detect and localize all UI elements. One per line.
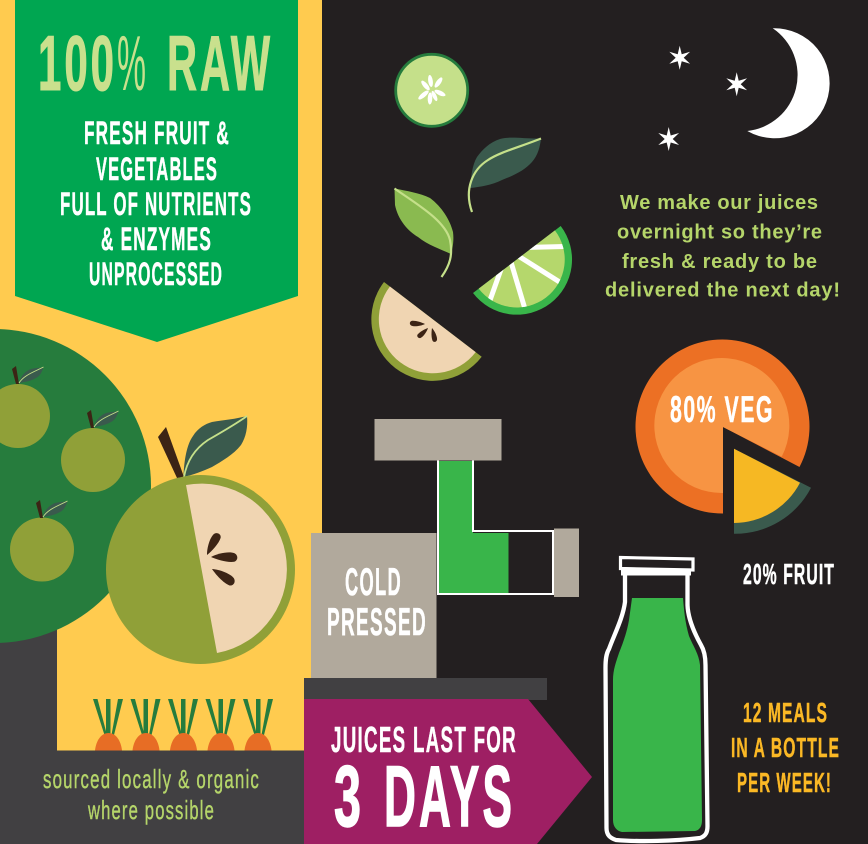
text block: banner list: FRESH FRUIT & (84, 115, 230, 151)
text block: banner list: UNPROCESSED (89, 256, 223, 292)
text block: banner list: FULL OF NUTRIENTS (60, 186, 252, 222)
text block: banner list (60, 115, 252, 292)
text block: sourced locally (43, 764, 260, 825)
callout: juices last for 3 days (304, 699, 592, 844)
label: cold pressed (327, 561, 427, 644)
icon: green leaf (394, 188, 453, 277)
icon: dark leaf (469, 138, 541, 212)
icon: apple seeds (203, 531, 237, 587)
label: 80% veg: 80% VEG (670, 389, 774, 430)
icon: tree apple 1 (0, 366, 50, 448)
text block: overnight: fresh & ready to be (622, 251, 817, 273)
icon: cucumber slice (396, 54, 468, 126)
title: 100% raw (38, 19, 273, 107)
icon: carrots (93, 699, 273, 750)
callout: juices last for 3 days: DAYS (384, 749, 515, 844)
text block: sourced locally: where possible (87, 795, 215, 825)
pie chart: 80% veg 20% fruit (636, 340, 811, 534)
text block: overnight (605, 192, 840, 302)
text block: overnight: delivered the next day! (605, 280, 840, 302)
panel: yellow background (0, 0, 322, 750)
icon: lime wedge (473, 226, 572, 315)
text block: banner list: VEGETABLES (96, 151, 218, 187)
icon: tree apple 3 (10, 500, 74, 582)
icon: apple tree (0, 329, 151, 643)
text block: 12 meals (731, 697, 840, 798)
title: 100% raw: 100 (38, 19, 117, 107)
icon: big apple (106, 416, 295, 664)
panel: grey ground (0, 600, 304, 844)
icon: moon and stars (658, 28, 830, 151)
icon: cold press machine (304, 419, 579, 700)
icon: tree apple 2 (61, 410, 125, 492)
callout: juices last for 3 days: 3 (334, 749, 361, 844)
label: cold pressed: COLD (345, 561, 402, 604)
text block: banner list: & ENZYMES (101, 221, 212, 257)
title: 100% raw: RAW (167, 19, 273, 107)
icon: apple wedge (371, 282, 482, 381)
text block: overnight: overnight so they’re (617, 222, 822, 244)
text block: overnight: We make our juices (620, 192, 818, 214)
title: 100% raw: % (117, 19, 146, 107)
text block: sourced locally: sourced locally & organic (43, 764, 260, 794)
callout: juices last for 3 days: JUICES LAST FOR (331, 719, 517, 760)
icon: juice bottle (606, 558, 708, 841)
icon: cold press machine: PRESSED (327, 601, 427, 644)
banner: 100% raw (15, 0, 298, 342)
